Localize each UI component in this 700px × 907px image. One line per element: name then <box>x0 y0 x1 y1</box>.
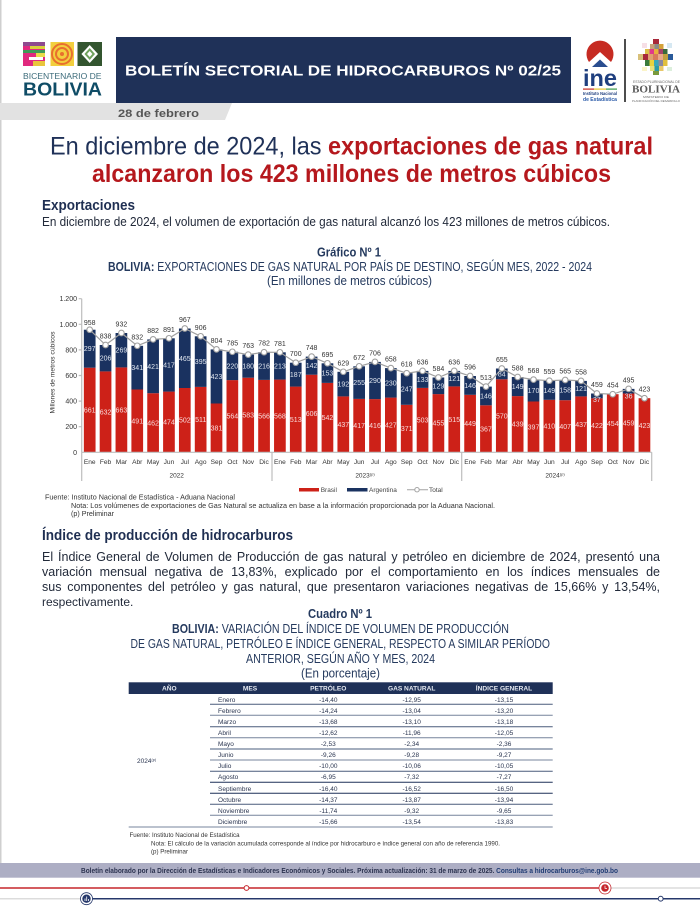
month labels: May <box>337 459 350 466</box>
column: índice general: -13,18 <box>495 719 514 726</box>
logo: INE: de Estadística <box>583 97 618 103</box>
logo: Bicentenario de Bolivia: BOLIVIA <box>23 80 102 100</box>
value labels: total: 636 <box>417 359 428 366</box>
column: índice general: -13,20 <box>495 708 514 715</box>
column: índice general: -7,27 <box>497 774 512 781</box>
column: gas natural: -13,54 <box>402 819 421 826</box>
table title: (En porcentaje) <box>301 666 380 680</box>
y axis: 800 <box>65 347 77 354</box>
value labels: total: 459 <box>591 382 603 389</box>
logo: INE: Instituto Nacional <box>583 91 617 97</box>
value labels: total: 658 <box>385 357 397 364</box>
value labels: total: 672 <box>353 355 365 362</box>
value labels: Brasil: 437 <box>337 422 349 429</box>
value labels: Argentina: 36 <box>625 394 633 400</box>
value labels: total: 565 <box>559 368 571 376</box>
value labels: Brasil: 449 <box>464 421 476 428</box>
value labels: Argentina: 247 <box>401 386 413 394</box>
table notes: (p) Preliminar <box>151 849 188 856</box>
column: índice general: -16,50 <box>495 786 514 793</box>
year labels: (p) <box>370 472 375 476</box>
value labels: total: 932 <box>116 322 127 328</box>
value labels: Brasil: 566 <box>258 414 270 421</box>
value labels: Argentina: 297 <box>84 346 96 353</box>
value labels: total: 706 <box>369 350 381 357</box>
column: índice general <box>495 697 514 826</box>
value labels: total: 596 <box>464 364 476 372</box>
value labels: Argentina: 149 <box>512 384 524 391</box>
logo: Estado Plurinacional de Bolivia: ESTADO PLURINACIONAL DE <box>633 80 681 84</box>
value labels: Brasil: 455 <box>433 421 444 428</box>
footer timeline decoration <box>0 882 700 905</box>
value labels: Argentina: 269 <box>116 348 127 355</box>
column: índice general: -2,36 <box>497 741 512 748</box>
column: índice general: -10,05 <box>495 763 514 770</box>
row header: year: 2024 <box>137 758 151 765</box>
value labels: Brasil: 568 <box>274 414 286 420</box>
month labels: Feb <box>290 459 302 466</box>
header band <box>116 37 571 103</box>
column: gas natural: -13,10 <box>402 719 421 726</box>
text block: production index summary <box>42 550 660 609</box>
icon: mosaic emblem <box>638 39 673 75</box>
column: índice general: -13,94 <box>495 797 514 804</box>
value labels: total: 558 <box>575 369 587 376</box>
text block: exports summary: En diciembre de 2024, el volumen de exportación de gas natural alcanzó los 423 millones de metros cúbicos. <box>42 214 610 229</box>
value labels: Argentina: 37 <box>593 397 601 404</box>
logo: Bicentenario de Bolivia: BICENTENARIO DE <box>23 72 102 81</box>
value labels: Brasil: 564 <box>227 414 238 421</box>
column: gas natural: -9,28 <box>404 752 419 759</box>
month labels <box>84 459 650 466</box>
month column: Abril <box>218 730 232 737</box>
value labels: total: 584 <box>433 366 444 373</box>
month column: Noviembre <box>218 808 250 815</box>
value labels: total: 832 <box>131 334 143 341</box>
month labels: Jun <box>354 459 365 466</box>
column: petróleo: -11,74 <box>319 808 338 815</box>
logo: INE: ine <box>583 65 617 91</box>
table notes <box>130 832 500 856</box>
month column: Marzo <box>218 719 236 726</box>
value labels: Brasil: 439 <box>512 422 524 429</box>
month column <box>218 697 252 826</box>
value labels: total: 838 <box>100 334 111 340</box>
month labels: Dic <box>449 459 460 466</box>
chart title <box>108 246 592 288</box>
value labels: total <box>84 317 650 394</box>
month column: Enero <box>218 697 236 704</box>
column: petróleo: -12,62 <box>319 730 338 737</box>
month labels: Feb <box>100 459 112 466</box>
month labels: Oct <box>608 459 618 466</box>
month labels: Jun <box>544 459 555 466</box>
column: petróleo: -14,37 <box>319 797 338 804</box>
table notes: Nota: El cálculo de la variación acumulada corresponde al índice por hidrocarburo e índice general con año de referencia 1990. <box>151 840 500 848</box>
icon: bar chart <box>80 893 92 905</box>
value labels: Brasil: 371 <box>401 426 413 433</box>
value labels: Argentina: 421 <box>147 364 159 371</box>
table notes: Fuente: Instituto Nacional de Estadística <box>130 832 240 839</box>
logo: INE <box>583 41 618 103</box>
table header: PETRÓLEO <box>310 684 346 692</box>
month labels: Dic <box>259 459 270 466</box>
value labels: total: 882 <box>147 328 159 335</box>
y axis: 600 <box>65 373 77 380</box>
value labels: total: 423 <box>639 387 650 394</box>
year labels: 2024 <box>545 472 560 480</box>
month labels: Ago <box>385 459 397 466</box>
value labels: Brasil: 410 <box>544 424 555 431</box>
value labels: Argentina: 187 <box>290 372 302 379</box>
value labels: Argentina: 216 <box>258 364 270 370</box>
value labels: Argentina: 395 <box>195 359 207 366</box>
month labels: Nov <box>242 459 255 466</box>
y axis: 400 <box>65 399 77 406</box>
value labels: Brasil: 513 <box>290 417 302 424</box>
x axis and year separators <box>82 452 652 481</box>
value labels: Argentina: 149 <box>544 388 555 395</box>
legend: Argentina <box>369 487 397 494</box>
value labels: Argentina: 341 <box>131 365 143 372</box>
column: gas natural: -12,95 <box>402 697 421 704</box>
column: gas natural: -10,06 <box>402 763 421 770</box>
value labels: Brasil: 583 <box>242 412 254 420</box>
value labels: Brasil: 367 <box>480 426 492 433</box>
date ribbon: 28 de febrero <box>118 108 199 120</box>
value labels: Brasil: 632 <box>100 409 111 416</box>
month labels: Jun <box>164 459 175 466</box>
value labels: Brasil: 454 <box>607 421 619 428</box>
value labels: Brasil: 491 <box>131 418 143 425</box>
value labels: Argentina: 146 <box>480 394 492 400</box>
year labels: 2022 <box>169 472 184 480</box>
value labels: Argentina <box>84 346 633 404</box>
month labels: Sep <box>591 459 603 466</box>
column: petróleo: -13,68 <box>319 719 338 726</box>
value labels: Argentina: 84 <box>498 371 506 378</box>
bars: Argentina <box>84 328 634 405</box>
table title: ANTERIOR, SEGÚN AÑO Y MES, 2024 <box>246 651 435 666</box>
column: índice general: -9,65 <box>497 808 512 815</box>
month labels: Nov <box>433 459 445 466</box>
text block: production index summary: sus componentes del petróleo y gas natural, que presentaron variaciones negativas de 15,66% y 13,54%, <box>42 580 660 594</box>
month labels: Abr <box>132 459 143 466</box>
month labels: Ago <box>575 459 587 466</box>
column: índice general: -13,83 <box>495 819 514 826</box>
y axis <box>50 296 82 457</box>
bars: Brasil <box>84 367 650 452</box>
value labels: Brasil: 397 <box>528 424 539 431</box>
table title: BOLIVIA: VARIACIÓN DEL ÍNDICE DE VOLUMEN DE PRODUCCIÓN <box>172 621 509 636</box>
chart notes <box>45 495 495 518</box>
column: índice general: -9,27 <box>497 752 512 759</box>
column: petróleo: -14,24 <box>319 708 338 715</box>
month labels: May <box>147 459 160 466</box>
month labels: Oct <box>227 459 238 466</box>
value labels: Argentina: 230 <box>385 380 397 387</box>
bulletin title: BOLETÍN SECTORIAL DE HIDROCARBUROS Nº 02/25 <box>125 62 561 80</box>
month column: Septiembre <box>218 786 252 793</box>
value labels: Argentina: 465 <box>179 356 191 363</box>
value labels: Argentina: 192 <box>337 382 349 389</box>
y axis: 1.000 <box>59 322 77 329</box>
table: index variation <box>129 682 553 827</box>
table title <box>130 606 550 680</box>
value labels: Brasil: 663 <box>116 407 127 414</box>
month labels: Ene <box>84 459 96 466</box>
legend <box>299 487 443 494</box>
column: gas natural: -2,34 <box>404 741 419 748</box>
legend: Brasil <box>321 487 338 494</box>
month labels: Abr <box>513 459 524 466</box>
chart title: BOLIVIA: EXPORTACIONES DE GAS NATURAL POR PAÍS DE DESTINO, SEGÚN MES, 2022 - 2024 <box>108 259 592 274</box>
value labels: Brasil: 511 <box>195 417 206 424</box>
value labels: Argentina: 146 <box>464 383 476 390</box>
column: índice general: -13,15 <box>495 697 514 704</box>
value labels: total: 618 <box>401 362 413 369</box>
stacked bar chart: exports by destination <box>50 296 652 494</box>
value labels: Argentina: 129 <box>433 383 444 390</box>
table title: DE GAS NATURAL, PETRÓLEO E ÍNDICE GENERAL, RESPECTO A SIMILAR PERÍODO <box>130 636 550 651</box>
value labels: total: 695 <box>322 352 333 359</box>
date ribbon <box>0 103 232 120</box>
section heading: Exportaciones: Exportaciones <box>42 198 135 214</box>
value labels: total: 958 <box>84 320 96 327</box>
column: petróleo: -10,00 <box>319 763 338 770</box>
month column: Febrero <box>218 708 241 715</box>
value labels: Brasil: 417 <box>353 423 365 430</box>
value labels: Brasil: 606 <box>306 411 318 418</box>
value labels: Brasil: 462 <box>147 420 159 427</box>
value labels: total: 906 <box>195 325 207 332</box>
markers: total <box>87 326 647 401</box>
value labels: total: 782 <box>258 341 270 348</box>
month labels: Jul <box>371 459 380 466</box>
column: gas natural: -13,87 <box>402 797 421 804</box>
month column: Diciembre <box>218 819 248 826</box>
month labels: Oct <box>417 459 428 466</box>
month labels: Mar <box>306 459 318 466</box>
value labels: total: 629 <box>337 360 349 367</box>
month labels: Ago <box>195 459 207 466</box>
value labels: Brasil: 474 <box>163 420 175 426</box>
text block: production index summary: respectivamente. <box>42 595 133 609</box>
section heading: production index: Índice de producción de hidrocarburos <box>42 527 293 544</box>
year labels: 2023 <box>355 472 370 480</box>
column: gas natural: -7,32 <box>404 774 419 781</box>
y axis: 1.200 <box>59 296 77 303</box>
column: gas natural: -11,96 <box>403 730 421 737</box>
month column: Mayo <box>218 741 234 748</box>
value labels: Argentina: 423 <box>211 374 222 381</box>
column: gas natural <box>402 697 421 826</box>
column: gas natural: -13,04 <box>402 708 421 715</box>
value labels: Argentina: 255 <box>353 380 365 387</box>
month column: Octubre <box>218 797 242 804</box>
chart notes: (p) Preliminar <box>71 511 115 518</box>
y axis: 0 <box>73 450 77 457</box>
value labels: Brasil: 515 <box>448 417 460 424</box>
month labels: Nov <box>623 459 635 466</box>
month labels: Mar <box>116 459 128 466</box>
y axis: Millones de metros cúbicos <box>50 331 56 413</box>
logo: Bicentenario de Bolivia <box>23 42 102 100</box>
year labels: (p) <box>560 472 565 476</box>
column: petróleo: -6,95 <box>321 774 336 781</box>
table header: GAS NATURAL <box>388 686 435 692</box>
table header: ÍNDICE GENERAL <box>476 684 532 692</box>
value labels: total: 781 <box>274 341 286 348</box>
value labels: Brasil: 570 <box>496 413 508 420</box>
value labels: total: 568 <box>528 368 539 375</box>
value labels: Brasil: 422 <box>591 423 603 430</box>
value labels: total: 763 <box>242 343 254 350</box>
table header: MES <box>243 686 258 692</box>
month labels: Jul <box>181 459 190 466</box>
logo: Estado Plurinacional de Bolivia: MINISTERIO DE <box>643 95 669 99</box>
year labels <box>169 472 565 480</box>
month labels: Ene <box>464 459 476 466</box>
value labels: Brasil: 407 <box>559 424 571 431</box>
table header <box>129 682 553 694</box>
column: índice general: -12,05 <box>495 730 514 737</box>
text block: production index summary: El Índice General de Volumen de Producción de gas natural y petróleo en diciembre de 2024, presentó una <box>42 550 660 564</box>
value labels: Brasil: 416 <box>369 423 381 430</box>
value labels: Brasil: 503 <box>417 418 428 425</box>
value labels: Brasil: 661 <box>84 408 96 414</box>
legend: Total <box>429 487 443 494</box>
table header: AÑO <box>162 684 177 692</box>
column: gas natural: -16,52 <box>402 786 421 793</box>
month labels: Sep <box>401 459 413 466</box>
row header: year: (p) <box>151 758 157 762</box>
value labels: total: 785 <box>227 340 238 347</box>
value labels: total: 700 <box>290 351 302 358</box>
table title: Cuadro Nº 1 <box>308 606 372 621</box>
month labels: Mar <box>496 459 508 466</box>
month labels: Jul <box>561 459 570 466</box>
value labels: Argentina: 153 <box>322 371 333 378</box>
headline: alcanzaron los 423 millones de metros cúbicos <box>92 160 611 188</box>
value labels: Brasil: 502 <box>179 418 191 425</box>
value labels: Brasil: 423 <box>639 423 650 430</box>
value labels: Argentina: 220 <box>227 364 238 370</box>
value labels: Argentina: 170 <box>528 388 539 395</box>
headline: En diciembre de 2024, las exportaciones de gas natural <box>50 132 653 160</box>
footer band <box>0 863 700 878</box>
value labels: Brasil: 427 <box>385 422 397 430</box>
value labels: total: 891 <box>163 327 175 334</box>
value labels: Brasil: 437 <box>575 422 587 429</box>
logo: Estado Plurinacional de Bolivia <box>632 39 681 103</box>
value labels: total: 513 <box>480 375 492 382</box>
value labels: Argentina: 158 <box>559 388 571 395</box>
column: petróleo: -9,26 <box>321 752 336 759</box>
month labels: May <box>527 459 540 466</box>
chart title: Gráfico Nº 1 <box>317 246 381 260</box>
value labels: total: 636 <box>448 359 460 366</box>
value labels: Argentina: 121 <box>575 386 587 393</box>
column: petróleo: -2,53 <box>321 741 336 748</box>
month column: Julio <box>218 763 232 770</box>
value labels: Brasil <box>84 407 650 433</box>
value labels: total: 454 <box>607 383 619 390</box>
chart title: (En millones de metros cúbicos) <box>267 274 432 288</box>
text block: production index summary: variación mensual negativa de 13,83%, explicado por el comportamiento en los índices mensuales de <box>42 565 660 579</box>
column: petróleo <box>319 697 338 826</box>
headline <box>50 132 653 188</box>
month labels: Abr <box>322 459 333 466</box>
value labels: Brasil: 459 <box>623 420 635 427</box>
chart notes: Nota: Los volúmenes de exportaciones de Gas Natural se actualiza en base a la información proporcionada por la Aduana Nacional. <box>71 503 495 510</box>
chart notes: Fuente: Instituto Nacional de Estadística - Aduana Nacional <box>45 495 235 502</box>
column: petróleo: -16,40 <box>319 786 338 793</box>
footer band: Boletín elaborado por la Dirección de Estadísticas e Indicadores Económicos y Sociales. Próxima actualización: 31 de marzo de 2025. Consultas a hidrocarburos@ine.gob.bo <box>81 866 619 875</box>
value labels: total: 967 <box>179 317 191 324</box>
month labels: Feb <box>480 459 492 466</box>
month column: Junio <box>218 752 234 759</box>
month labels: Ene <box>274 459 286 466</box>
column: gas natural: -9,32 <box>404 808 419 815</box>
value labels: total: 804 <box>211 338 222 345</box>
value labels: Argentina: 206 <box>100 356 111 363</box>
value labels: total: 588 <box>512 366 524 372</box>
logo: Estado Plurinacional de Bolivia: BOLIVIA <box>632 84 680 96</box>
value labels: Brasil: 381 <box>211 425 222 432</box>
value labels: total: 748 <box>306 345 318 352</box>
value labels: Argentina: 133 <box>417 377 428 384</box>
value labels: Argentina: 142 <box>306 363 318 370</box>
column: petróleo: -15,66 <box>319 819 338 826</box>
column: petróleo: -14,40 <box>319 697 338 704</box>
value labels: total: 559 <box>544 369 555 376</box>
value labels: Argentina: 213 <box>274 364 286 370</box>
y axis: 200 <box>65 424 77 431</box>
value labels: Argentina: 180 <box>242 364 254 371</box>
icon: clock <box>599 882 611 894</box>
value labels: Argentina: 290 <box>369 378 381 385</box>
value labels: Argentina: 417 <box>163 362 175 370</box>
line: total <box>90 328 644 398</box>
logo: Estado Plurinacional de Bolivia: PLANIFICACIÓN DEL DESARROLLO <box>632 98 681 103</box>
value labels: total: 495 <box>623 377 635 384</box>
value labels: Brasil: 542 <box>322 415 333 422</box>
month labels: Sep <box>211 459 223 466</box>
value labels: total: 655 <box>496 357 508 364</box>
month labels: Dic <box>640 459 650 466</box>
month column: Agosto <box>218 774 239 781</box>
value labels: Argentina: 121 <box>448 376 460 383</box>
